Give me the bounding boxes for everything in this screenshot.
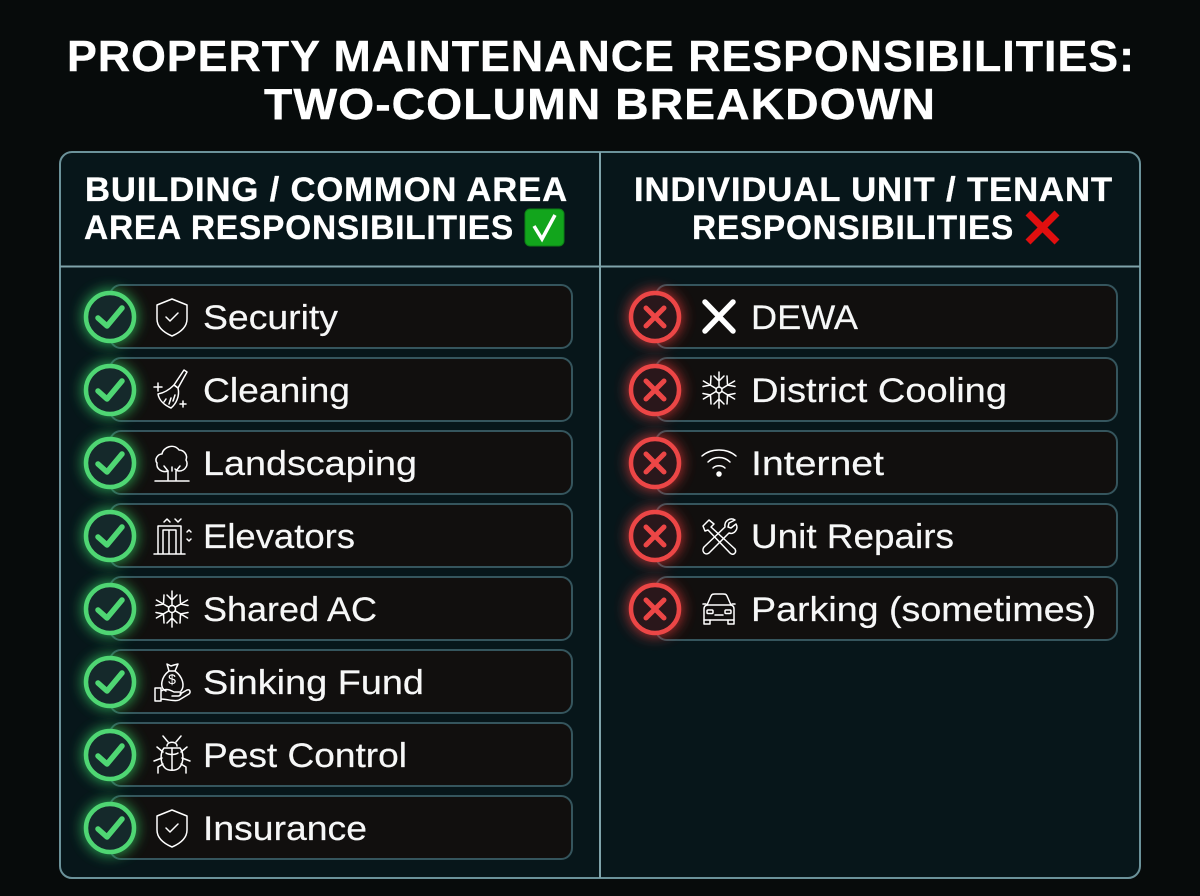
title: PROPERTY MAINTENANCE RESPONSIBILITIES:: [67, 32, 1135, 81]
icon: tools: [703, 519, 737, 554]
label: Sinking Fund: [203, 664, 424, 702]
row: Sinking Fund: [83, 650, 572, 713]
row: Insurance: [83, 796, 572, 859]
column header: building: [84, 171, 568, 247]
icon: snowflake: [703, 372, 735, 408]
label: District Cooling: [751, 372, 1007, 410]
icon: shield check: [157, 810, 187, 847]
icon: green check box: [525, 209, 564, 246]
icon: cross: [705, 302, 733, 331]
label: Internet: [751, 445, 885, 483]
label: Parking (sometimes): [751, 591, 1096, 629]
label: DEWA: [751, 299, 858, 337]
label: Cleaning: [203, 372, 350, 410]
label: Pest Control: [203, 737, 407, 775]
icon: wifi: [702, 450, 736, 476]
label: Elevators: [203, 518, 355, 556]
row: DEWA: [628, 285, 1117, 348]
row: Cleaning: [83, 358, 572, 421]
row: Unit Repairs: [628, 504, 1117, 567]
row: Internet: [628, 431, 1117, 494]
icon: elevator: [154, 519, 191, 554]
row: Pest Control: [83, 723, 572, 786]
column header: building: BUILDING / COMMON AREA: [85, 171, 568, 209]
row: Elevators: [83, 504, 572, 567]
label: Shared AC: [203, 591, 377, 629]
column header: tenant: INDIVIDUAL UNIT / TENANT: [634, 171, 1113, 209]
row: District Cooling: [628, 358, 1117, 421]
row: Parking: [628, 577, 1117, 640]
icon: red cross: [1028, 213, 1057, 242]
row: Shared AC: [83, 577, 572, 640]
icon: car: [703, 594, 735, 624]
dollar sign: $: [168, 671, 176, 687]
icon: snowflake: [156, 591, 188, 627]
label: Insurance: [203, 810, 367, 848]
column header: building: AREA RESPONSIBILITIES: [84, 209, 514, 247]
icon: broom: [154, 370, 187, 408]
row: Landscaping: [83, 431, 572, 494]
title: [67, 32, 1135, 129]
icon: tree: [155, 446, 189, 481]
label: Unit Repairs: [751, 518, 954, 556]
label: Landscaping: [203, 445, 417, 483]
icon: beetle: [154, 736, 190, 773]
icon: shield: [157, 299, 187, 336]
title: TWO-COLUMN BREAKDOWN: [264, 80, 936, 129]
row: Security: [83, 285, 572, 348]
table panel: [60, 152, 1140, 878]
icon: money bag in hand: [155, 664, 190, 701]
label: Security: [203, 299, 338, 337]
column header: tenant: [634, 171, 1113, 247]
column header: tenant: RESPONSIBILITIES: [692, 209, 1014, 247]
